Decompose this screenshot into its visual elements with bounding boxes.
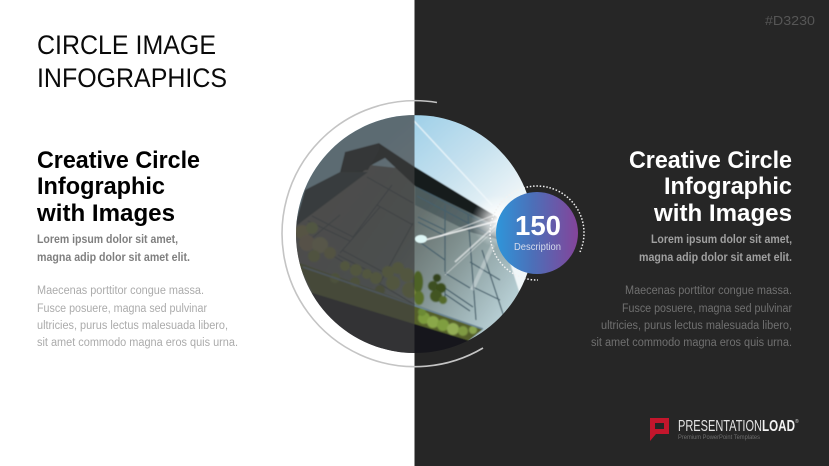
- logo: PresentationLoad: Premium PowerPoint Templates: [678, 434, 761, 441]
- title: [37, 30, 227, 93]
- left subheading: magna adip dolor sit amet elit.: [37, 252, 190, 264]
- dark tint over left half: [290, 110, 414, 360]
- right body text: [591, 285, 792, 349]
- badge: 150 description: Description: [514, 241, 561, 253]
- left body text: [37, 285, 238, 349]
- right body text: sit amet commodo magna eros quis urna.: [591, 337, 792, 349]
- sky: [297, 115, 528, 292]
- right heading: Infographic: [664, 173, 792, 200]
- building facade: [290, 165, 525, 345]
- ground: [312, 292, 468, 353]
- dark right panel: [414, 0, 829, 466]
- title: CIRCLE IMAGE: [37, 30, 216, 60]
- left heading: Infographic: [37, 173, 165, 200]
- left body text: sit amet commodo magna eros quis urna.: [37, 337, 238, 349]
- left heading: with Images: [36, 200, 175, 227]
- panel: right text block: [591, 147, 792, 349]
- trees: [295, 222, 477, 336]
- reflective tree band: [297, 262, 483, 342]
- left body text: Maecenas porttitor congue massa.: [37, 285, 204, 297]
- right subheading: [639, 234, 792, 264]
- right body text: ultricies, purus lectus malesuada libero,: [601, 320, 792, 332]
- right subheading: magna adip dolor sit amet elit.: [639, 252, 792, 264]
- sky light streak: [414, 120, 487, 200]
- icon: red P mark: [650, 418, 669, 441]
- logo: PresentationLoad: [650, 418, 799, 441]
- logo: PresentationLoad: PRESENTATION: [678, 418, 762, 435]
- facade bottom frame: [303, 267, 483, 329]
- right subheading: Lorem ipsum dolor sit amet,: [651, 234, 792, 246]
- logo: PresentationLoad: ®: [795, 418, 799, 425]
- left heading: Creative Circle: [37, 147, 200, 174]
- lens flare spot: [415, 235, 427, 243]
- left heading: [36, 147, 200, 227]
- title: INFOGRAPHICS: [37, 63, 227, 93]
- right body text: Maecenas porttitor congue massa.: [625, 285, 792, 297]
- panel: left text block: [36, 147, 238, 349]
- facade panel lines: [322, 188, 415, 304]
- right heading: [629, 147, 792, 227]
- outer ring arc: [282, 101, 483, 367]
- right heading: with Images: [653, 200, 792, 227]
- left subheading: Lorem ipsum dolor sit amet,: [37, 234, 178, 246]
- sun flare: [472, 204, 504, 245]
- left body text: ultricies, purus lectus malesuada libero,: [37, 320, 228, 332]
- right body text: Fusce posuere, magna sed pulvinar: [622, 303, 792, 315]
- logo: PresentationLoad: LOAD: [762, 418, 795, 435]
- left body text: Fusce posuere, magna sed pulvinar: [37, 303, 207, 315]
- shaded facade under roof: [415, 186, 496, 239]
- badge: 150 description: [496, 192, 578, 274]
- left subheading: [37, 234, 190, 264]
- badge: 150 description: 150: [515, 210, 561, 241]
- roof band: [340, 143, 497, 224]
- code label: #D3230: [765, 13, 815, 28]
- right heading: Creative Circle: [629, 147, 792, 174]
- circle photo of building: [296, 115, 528, 353]
- dotted ring: [490, 186, 584, 280]
